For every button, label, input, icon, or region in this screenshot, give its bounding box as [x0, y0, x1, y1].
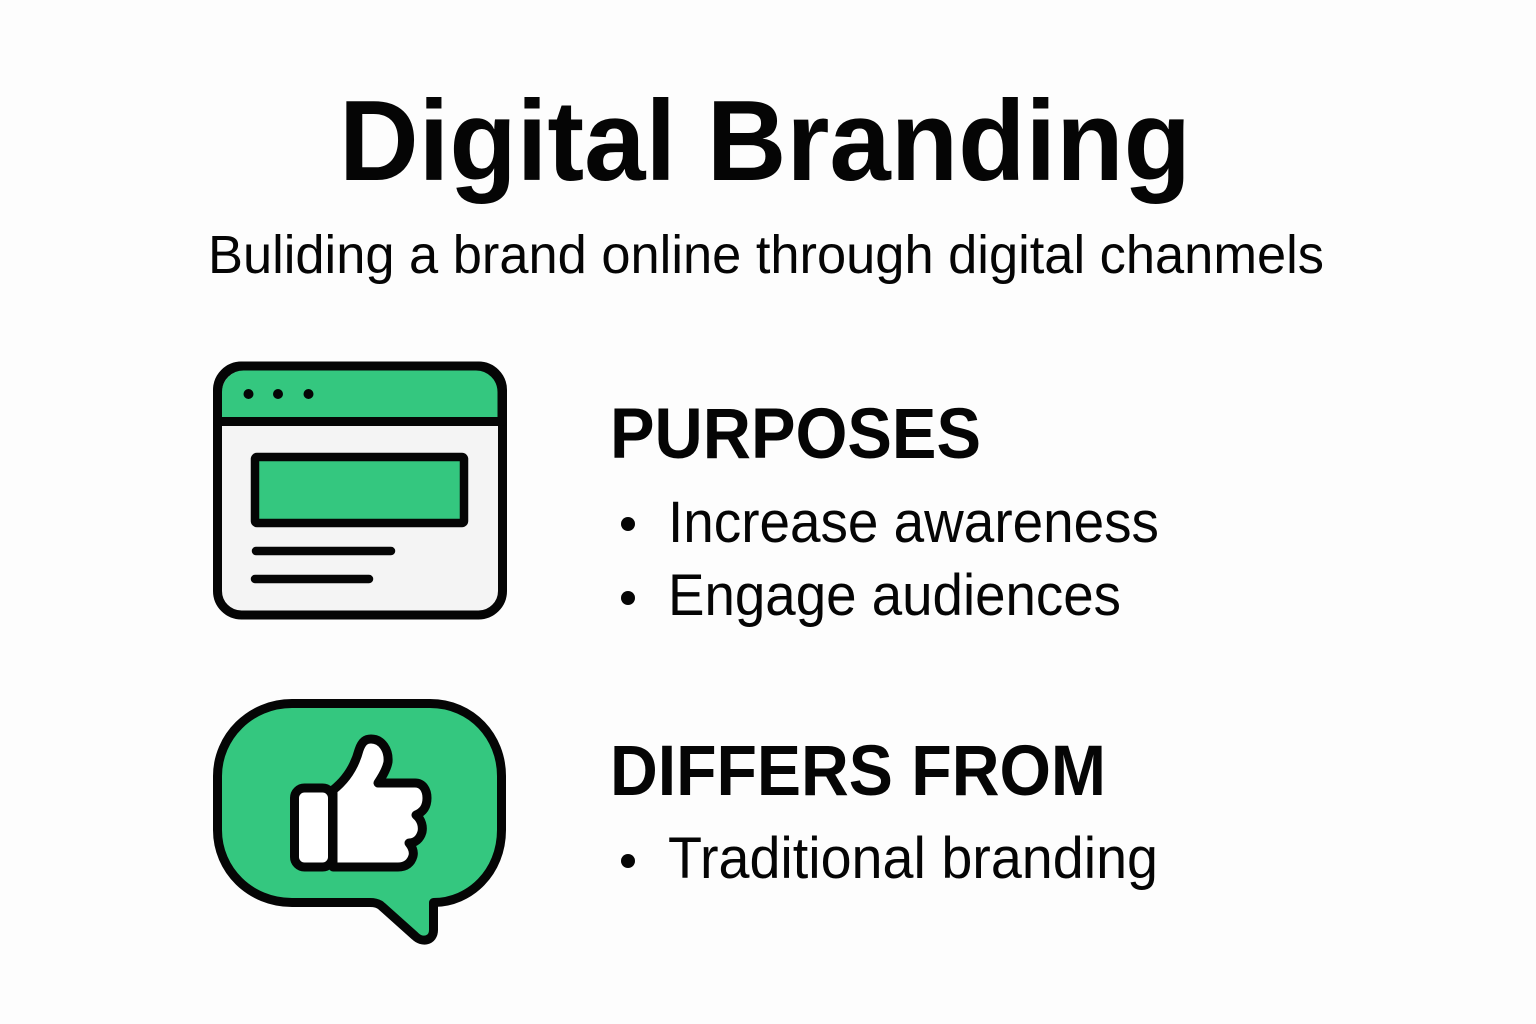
heading: purposes: PURPOSES — [610, 395, 981, 474]
icon: browser window — [218, 366, 502, 615]
list: purposes: Engage audiences — [668, 563, 1121, 628]
icon: speech bubble with thumbs up — [218, 704, 502, 940]
heading: differs from: DIFFERS FROM — [610, 732, 1106, 811]
title: Digital Branding — [339, 78, 1191, 205]
subtitle: Buliding a brand online through digital chanmels — [208, 225, 1324, 285]
list: purposes — [621, 490, 1159, 628]
list: differs from: Traditional branding — [668, 826, 1158, 891]
list: purposes: Increase awareness — [668, 490, 1159, 555]
